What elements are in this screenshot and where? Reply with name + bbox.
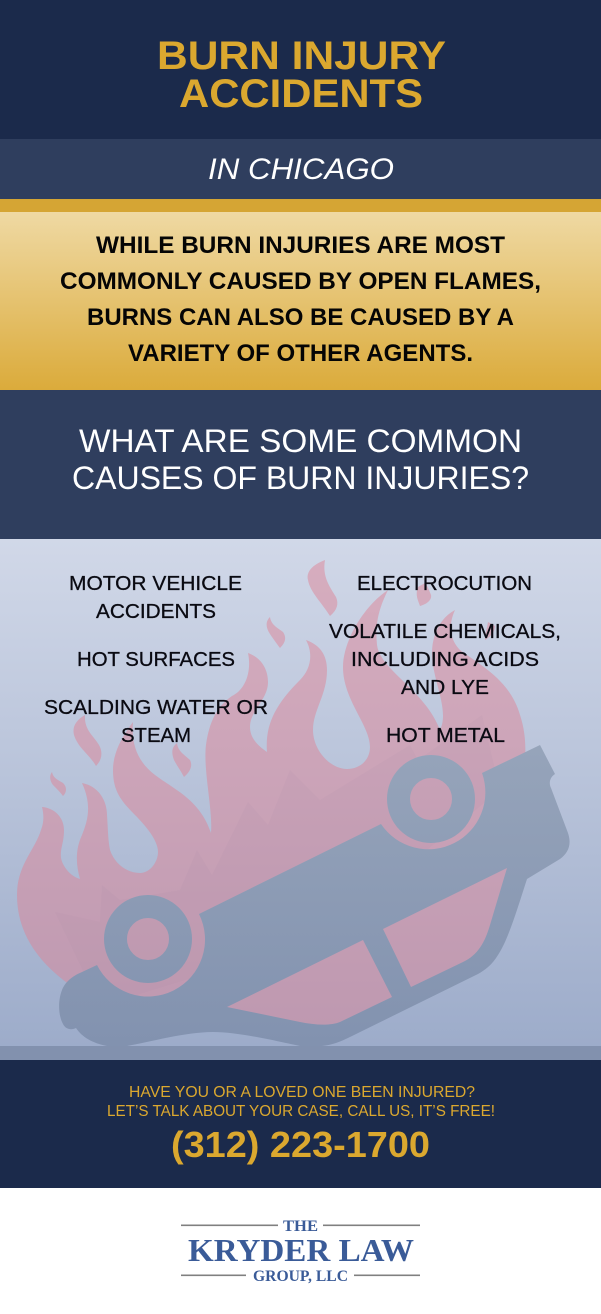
causes list: left column: STEAM [121,724,191,747]
title banner [0,0,601,139]
causes list: right column: VOLATILE CHEMICALS, [329,620,561,643]
panel: causes [0,539,601,1046]
call to action footer: HAVE YOU OR A LOVED ONE BEEN INJURED? [129,1084,475,1101]
title banner: BURN INJURY [157,34,446,78]
call to action footer [0,1060,601,1188]
subtitle band [0,139,601,199]
causes list: left column: SCALDING WATER OR [44,696,268,719]
call to action footer: LET’S TALK ABOUT YOUR CASE, CALL US, IT’S FREE! [107,1103,495,1120]
intro panel: COMMONLY CAUSED BY OPEN FLAMES, [60,268,541,295]
illustration: overturned car [59,745,570,1046]
question heading: WHAT ARE SOME COMMON [79,423,522,459]
causes list: right column [329,572,561,747]
subtitle band: IN CHICAGO [208,153,394,186]
causes list: left column [44,572,268,747]
icon: rear wheel [398,766,464,832]
gold divider [0,199,601,212]
question heading [0,390,601,539]
question heading: CAUSES OF BURN INJURIES? [72,460,529,496]
intro panel [0,212,601,390]
causes list: left column: MOTOR VEHICLE [69,572,242,595]
causes list: right column: HOT METAL [386,724,505,747]
intro panel: BURNS CAN ALSO BE CAUSED BY A [87,304,514,331]
causes list: right column: INCLUDING ACIDS [351,648,539,671]
causes list: right column: AND LYE [401,676,489,699]
causes list: right column: ELECTROCUTION [357,572,532,595]
road strip [0,1046,601,1060]
intro panel: WHILE BURN INJURIES ARE MOST [96,232,505,259]
intro panel: VARIETY OF OTHER AGENTS. [128,340,473,367]
icon: front wheel [116,906,180,972]
causes list: left column: ACCIDENTS [96,600,216,623]
logo panel [0,1188,601,1314]
title banner: ACCIDENTS [179,72,423,116]
logo panel: GROUP, LLC [253,1268,348,1285]
illustration: inner flames [55,715,500,1000]
illustration: flames [17,560,525,1032]
logo panel: THE [283,1218,318,1235]
phone number: (312) 223-1700 [171,1124,430,1165]
logo panel: KRYDER LAW [188,1232,414,1268]
causes list: left column: HOT SURFACES [77,648,235,671]
